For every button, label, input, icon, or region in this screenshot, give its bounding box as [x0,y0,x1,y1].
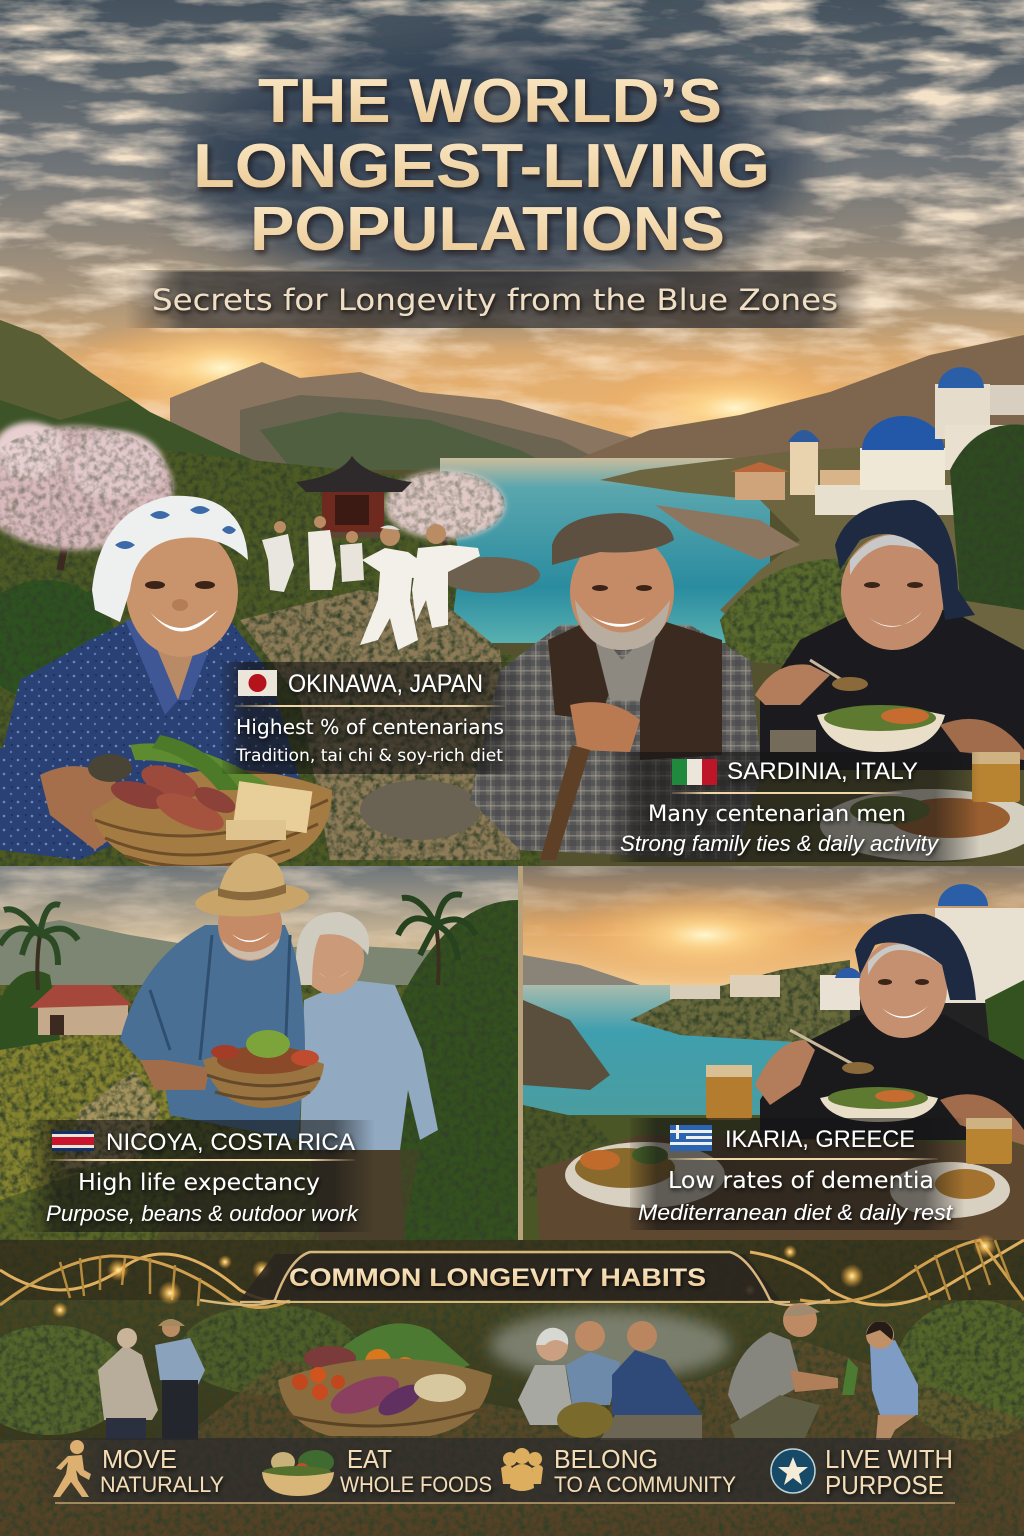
label: eat whole foods: WHOLE FOODS [340,1472,492,1497]
right coast and village [600,367,1024,680]
left landscape: greenery and ground [0,430,540,870]
icon: community group [501,1448,543,1491]
Ikaria text: Mediterranean diet & daily rest [638,1200,953,1225]
portrait: Okinawa woman [0,496,300,860]
sea [440,458,770,643]
cherry blossom trees [0,422,505,570]
label: live with purpose [825,1444,953,1500]
title: LONGEST-LIVING [193,132,770,201]
Nicoya text: High life expectancy [78,1170,320,1196]
label: belong to a community: BELONG [554,1444,658,1474]
caption: Okinawa [222,662,522,774]
Ikaria text: IKARIA, GREECE [725,1126,915,1153]
label: eat whole foods [340,1444,492,1497]
caption: Sardinia [610,752,980,862]
couple [120,853,438,1250]
portrait: Sardinia man [470,513,762,860]
Ikaria woman [755,914,1024,1145]
title: POPULATIONS [250,195,725,264]
label: move naturally: NATURALLY [100,1472,224,1497]
label: belong to a community: TO A COMMUNITY [554,1472,736,1497]
habits: DNA helix right [744,1234,1024,1305]
Nicoya text [46,1129,359,1226]
background scene: mountains and sun [0,308,1024,560]
Ikaria text [638,1126,953,1225]
label: move naturally: MOVE [102,1444,177,1474]
table [536,1135,1024,1250]
background scene: sky [0,0,1024,470]
habits: walking couple [98,1319,205,1440]
label: belong to a community [554,1444,736,1497]
label: live with purpose: PURPOSE [825,1470,944,1500]
palm trees [0,894,476,990]
label: eat whole foods: EAT [347,1444,392,1474]
Sardinia text: Strong family ties & daily activity [620,831,940,856]
Okinawa text: Highest % of centenarians [236,715,504,739]
portrait: Sardinia woman with bowl [755,500,1024,770]
habits heading banner [200,1252,830,1305]
icon: food bowl [262,1450,334,1496]
beer glass [706,1065,752,1120]
title [193,67,770,264]
label: live with purpose: LIVE WITH [825,1444,953,1474]
habits: grandfather and boy planting [728,1303,918,1440]
Sardinia text: SARDINIA, ITALY [727,758,918,785]
flag: Greece [670,1125,712,1151]
Okinawa text [235,670,504,766]
flag: Italy [672,759,717,785]
caption: Ikaria [630,1118,965,1230]
icon: walking person [53,1440,91,1497]
Nicoya text: NICOYA, COSTA RICA [106,1129,355,1156]
flag: Costa Rica [52,1131,94,1151]
Sardinia text [620,758,940,856]
Nicoya text: Purpose, beans & outdoor work [46,1201,359,1226]
flag: Japan [238,670,277,696]
panel divider [518,866,523,1246]
habits icon bar [30,1438,980,1504]
habits: DNA helix left [0,1254,290,1318]
title: THE WORLD’S [258,67,722,136]
Sardinia text: Many centenarian men [648,802,906,827]
food basket [88,735,332,867]
base ground [0,470,1024,870]
icon: star compass [771,1449,815,1493]
table setting: plate and glass [820,752,1024,861]
subtitle band [125,270,870,328]
Okinawa text: Tradition, tai chi & soy-rich diet [235,746,503,766]
panel: Nicoya scene [0,853,518,1250]
Ikaria text: Low rates of dementia [668,1168,934,1194]
tai chi group [262,516,480,650]
habits heading banner: COMMON LONGEVITY HABITS [289,1264,706,1292]
habits: vegetable basket [278,1323,492,1436]
habits: three elders [518,1321,702,1440]
panel: Ikaria scene [523,866,1024,1250]
food plates [565,1118,1012,1218]
subtitle band: Secrets for Longevity from the Blue Zones [152,283,838,317]
temple [296,456,412,538]
house [30,985,132,1035]
caption: Nicoya [30,1120,375,1232]
label: move naturally [100,1444,224,1497]
panel: habits background [0,1240,1024,1536]
Okinawa text: OKINAWA, JAPAN [288,670,483,698]
